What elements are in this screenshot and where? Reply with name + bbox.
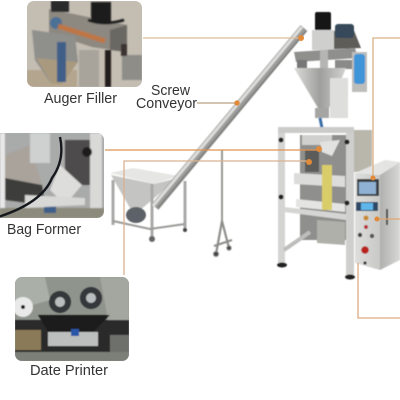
label: Date Printer: Date Printer [30,362,108,379]
tripod stand [214,150,232,256]
filler head [294,12,367,128]
bagger frame [277,127,372,280]
machine: screw conveyor with hopper, tripod, filler and bagger [110,12,400,280]
panel: date printer photo [13,277,129,361]
callout lines [105,38,400,318]
conveyor tube [153,27,306,208]
label: Screw Conveyor: Screw [151,82,190,99]
label: Auger Filler: Auger Filler [44,90,117,107]
panel: auger filler photo [27,1,142,87]
control box [355,160,400,270]
feed hopper [110,168,187,242]
callout markers [234,35,380,222]
label: Bag Former: Bag Former [7,221,81,238]
label: Screw Conveyor: Conveyor [136,95,197,112]
panel: bag former photo [0,133,104,218]
label: Screw Conveyor [136,82,197,112]
